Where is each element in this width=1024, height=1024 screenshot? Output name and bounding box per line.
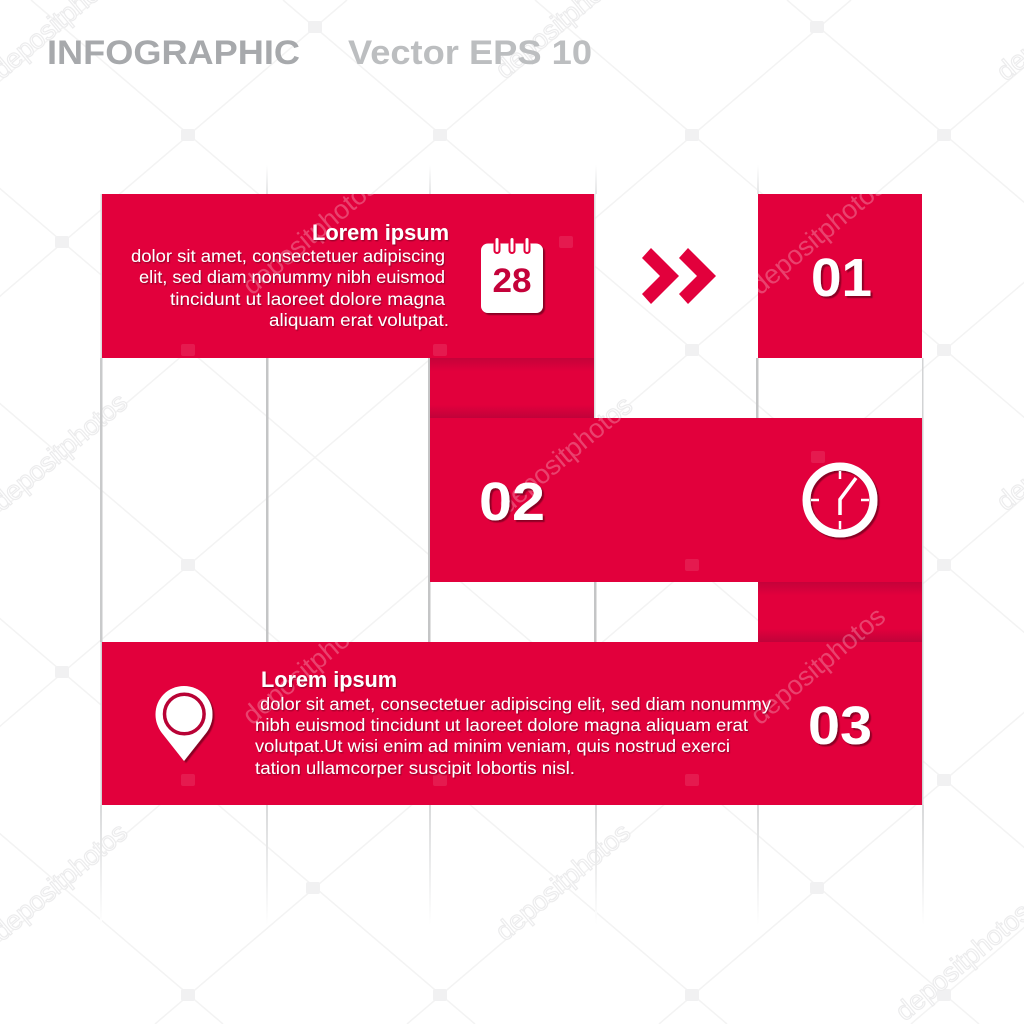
fold: top to middle	[430, 358, 594, 418]
panel: 02: depositphotos	[492, 390, 638, 520]
fold: middle to bottom	[758, 582, 922, 642]
panel: 03: depositphotos	[745, 601, 891, 731]
heading: top banner: Lorem ipsum	[312, 220, 449, 245]
text block: bottom banner	[255, 694, 771, 778]
title	[47, 34, 592, 72]
icon: calendar	[481, 238, 543, 313]
text block: bottom banner: tation ullamcorper suscipit lobortis nisl.	[255, 758, 575, 778]
text block: bottom banner: volutpat.Ut wisi enim ad minim veniam, quis nostrud exerci	[255, 736, 730, 756]
icon: clock	[806, 466, 874, 534]
text block: top banner	[131, 246, 449, 330]
text block: top banner: tincidunt ut laoreet dolore magna	[170, 289, 445, 309]
panel: top banner	[102, 194, 594, 358]
text block: bottom banner: nibh euismod tincidunt ut laoreet dolore magna aliquam erat	[255, 715, 748, 735]
panel: 01	[758, 194, 922, 358]
column lines	[100, 165, 924, 925]
arrow: double chevron	[642, 248, 716, 304]
panel: 03	[102, 642, 922, 805]
title: Vector EPS 10	[348, 34, 592, 72]
panel: 02: 02	[479, 472, 545, 532]
panel: 01: depositphotos	[745, 171, 891, 301]
panel: 03: 03	[808, 696, 872, 756]
watermarks on white: depositphotos	[492, 390, 638, 520]
heading: bottom banner: Lorem ipsum	[261, 667, 397, 692]
text block: bottom banner: dolor sit amet, consectetuer adipiscing elit, sed diam nonummy	[260, 694, 771, 714]
title: INFOGRAPHIC	[47, 34, 300, 72]
text block: top banner: aliquam erat volutpat.	[269, 310, 449, 330]
panel: 02	[430, 418, 922, 582]
panel: 03: depositphotos	[237, 601, 383, 731]
icon: map pin	[156, 686, 212, 761]
text block: top banner: elit, sed diam nonummy nibh euismod	[139, 267, 445, 287]
panel: top banner: depositphotos	[237, 171, 383, 301]
panel: 01: 01	[811, 248, 872, 308]
icon: calendar: 28	[492, 262, 532, 300]
fold: middle to bottom: depositphotos	[745, 601, 891, 731]
text block: top banner: dolor sit amet, consectetuer adipiscing	[131, 246, 445, 266]
watermarks on white: depositphotos	[490, 817, 636, 947]
